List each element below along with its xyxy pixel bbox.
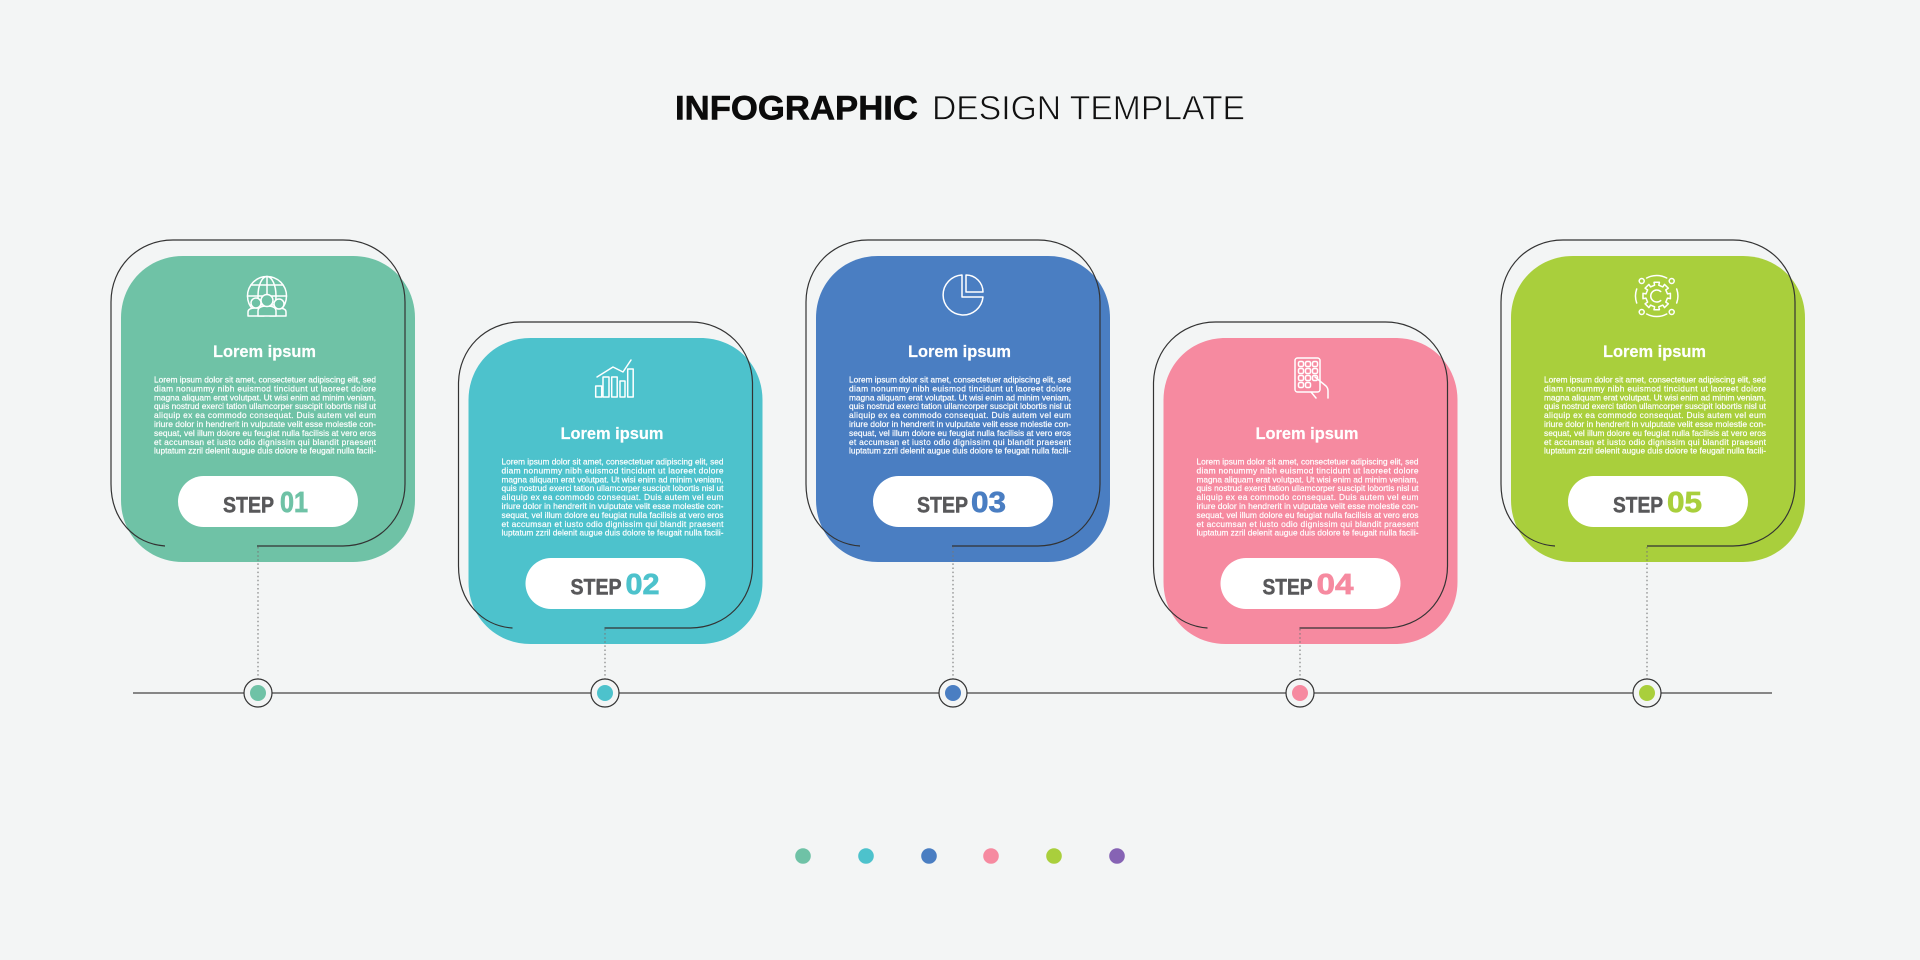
card background	[468, 338, 762, 644]
body text: et accumsan et iusto odio dignissim qui blandit praesent	[1196, 519, 1419, 529]
body text: sequat, vel illum dolore eu feugiat nulla facilisis at vero eros	[502, 510, 724, 520]
step badge	[1568, 476, 1748, 527]
body text: luptatum zzril delenit augue duis dolore te feugait nulla facili-	[154, 446, 376, 456]
body text: aliquip ex ea commodo consequat. Duis autem vel eum	[1544, 410, 1766, 420]
card background	[816, 256, 1110, 562]
body text	[154, 374, 377, 456]
timeline node 3	[939, 547, 967, 707]
step badge	[178, 476, 358, 527]
colour palette dots	[795, 848, 1125, 864]
panel: step 4	[1154, 322, 1458, 644]
icon: pie chart	[943, 275, 983, 315]
body text	[1196, 456, 1419, 538]
body text: quis nostrud exerci tation ullamcorper suscipit lobortis nisl ut	[1544, 401, 1767, 411]
body text: luptatum zzril delenit augue duis dolore te feugait nulla facili-	[1544, 446, 1766, 456]
timeline node 2	[591, 629, 619, 707]
step badge	[526, 558, 706, 609]
body text: aliquip ex ea commodo consequat. Duis autem vel eum	[502, 492, 724, 502]
title: DESIGN TEMPLATE	[932, 90, 1245, 128]
body text: magna aliquam erat volutpat. Ut wisi enim ad minim veniam,	[1196, 474, 1418, 484]
step badge: 05	[1667, 487, 1702, 519]
panel: step 1	[111, 240, 415, 562]
body text: diam nonummy nibh euismod tincidunt ut laoreet dolore	[502, 465, 724, 475]
heading: Lorem ipsum	[560, 424, 664, 443]
timeline node 4	[1286, 629, 1314, 707]
body text: quis nostrud exerci tation ullamcorper suscipit lobortis nisl ut	[1196, 483, 1419, 493]
body text: Lorem ipsum dolor sit amet, consectetuer adipiscing elit, sed	[502, 456, 724, 466]
body text: iriure dolor in hendrerit in vulputate velit esse molestie con-	[1544, 419, 1766, 429]
panel: step 2	[458, 322, 762, 644]
body text: magna aliquam erat volutpat. Ut wisi enim ad minim veniam,	[502, 474, 724, 484]
body text: luptatum zzril delenit augue duis dolore te feugait nulla facili-	[1196, 528, 1419, 538]
body text: et accumsan et iusto odio dignissim qui blandit praesent	[849, 437, 1072, 447]
body text: sequat, vel illum dolore eu feugiat nulla facilisis at vero eros	[154, 428, 376, 438]
card outline	[111, 240, 405, 546]
body text: sequat, vel illum dolore eu feugiat nulla facilisis at vero eros	[849, 428, 1071, 438]
body text	[502, 456, 724, 538]
body text: et accumsan et iusto odio dignissim qui blandit praesent	[502, 519, 724, 529]
heading: Lorem ipsum	[1256, 424, 1358, 443]
body text: magna aliquam erat volutpat. Ut wisi enim ad minim veniam,	[1544, 392, 1766, 402]
body text: diam nonummy nibh euismod tincidunt ut laoreet dolore	[1544, 383, 1766, 393]
body text: iriure dolor in hendrerit in vulputate velit esse molestie con-	[1196, 501, 1419, 511]
step badge: 02	[626, 569, 660, 601]
body text: iriure dolor in hendrerit in vulputate velit esse molestie con-	[849, 419, 1071, 429]
timeline	[133, 547, 1772, 707]
body text: magna aliquam erat volutpat. Ut wisi enim ad minim veniam,	[849, 392, 1071, 402]
body text	[849, 374, 1072, 456]
step badge: STEP	[1262, 574, 1312, 600]
body text: Lorem ipsum dolor sit amet, consectetuer adipiscing elit, sed	[154, 374, 376, 384]
body text: et accumsan et iusto odio dignissim qui blandit praesent	[1544, 437, 1767, 447]
step badge: STEP	[917, 492, 968, 518]
title: INFOGRAPHIC	[675, 90, 918, 128]
body text: Lorem ipsum dolor sit amet, consectetuer adipiscing elit, sed	[849, 374, 1071, 384]
body text: magna aliquam erat volutpat. Ut wisi enim ad minim veniam,	[154, 392, 376, 402]
body text: et accumsan et iusto odio dignissim qui blandit praesent	[154, 437, 377, 447]
step badge: STEP	[570, 574, 622, 600]
body text	[1544, 374, 1767, 456]
step badge: 04	[1316, 569, 1354, 601]
step badge: 01	[280, 487, 308, 519]
icon: gear with orbit nodes	[1635, 275, 1678, 317]
body text: aliquip ex ea commodo consequat. Duis autem vel eum	[154, 410, 376, 420]
card outline	[1501, 240, 1795, 546]
body text: diam nonummy nibh euismod tincidunt ut laoreet dolore	[1196, 465, 1419, 475]
card background	[1511, 256, 1805, 562]
body text: Lorem ipsum dolor sit amet, consectetuer adipiscing elit, sed	[1196, 456, 1419, 466]
body text: quis nostrud exerci tation ullamcorper suscipit lobortis nisl ut	[154, 401, 377, 411]
body text: luptatum zzril delenit augue duis dolore te feugait nulla facili-	[849, 446, 1071, 456]
step badge: STEP	[1613, 492, 1663, 518]
body text: quis nostrud exerci tation ullamcorper suscipit lobortis nisl ut	[849, 401, 1072, 411]
timeline node 5	[1633, 547, 1661, 707]
card outline	[806, 240, 1100, 546]
step badge: STEP	[223, 492, 274, 518]
title	[675, 90, 1245, 128]
panel: step 3	[806, 240, 1110, 562]
body text: iriure dolor in hendrerit in vulputate velit esse molestie con-	[502, 501, 724, 511]
body text: quis nostrud exerci tation ullamcorper suscipit lobortis nisl ut	[502, 483, 724, 493]
step badge: 03	[971, 487, 1006, 519]
body text: luptatum zzril delenit augue duis dolore te feugait nulla facili-	[502, 528, 724, 538]
body text: diam nonummy nibh euismod tincidunt ut laoreet dolore	[154, 383, 376, 393]
body text: sequat, vel illum dolore eu feugiat nulla facilisis at vero eros	[1196, 510, 1418, 520]
body text: Lorem ipsum dolor sit amet, consectetuer adipiscing elit, sed	[1544, 374, 1766, 384]
body text: sequat, vel illum dolore eu feugiat nulla facilisis at vero eros	[1544, 428, 1766, 438]
card outline	[458, 322, 752, 628]
heading: Lorem ipsum	[908, 342, 1011, 361]
card outline	[1154, 322, 1448, 628]
card background	[121, 256, 415, 562]
icon: bar chart with trend line	[596, 360, 633, 397]
step badge	[873, 476, 1053, 527]
card background	[1164, 338, 1458, 644]
body text: aliquip ex ea commodo consequat. Duis autem vel eum	[849, 410, 1071, 420]
body text: diam nonummy nibh euismod tincidunt ut laoreet dolore	[849, 383, 1071, 393]
timeline node 1	[244, 547, 272, 707]
panel: step 5	[1501, 240, 1805, 562]
icon: globe with people	[248, 276, 286, 316]
step badge	[1220, 558, 1400, 609]
heading: Lorem ipsum	[213, 342, 316, 361]
heading: Lorem ipsum	[1603, 342, 1706, 361]
icon: hand holding keypad phone	[1295, 358, 1328, 398]
body text: iriure dolor in hendrerit in vulputate velit esse molestie con-	[154, 419, 376, 429]
body text: aliquip ex ea commodo consequat. Duis autem vel eum	[1196, 492, 1419, 502]
